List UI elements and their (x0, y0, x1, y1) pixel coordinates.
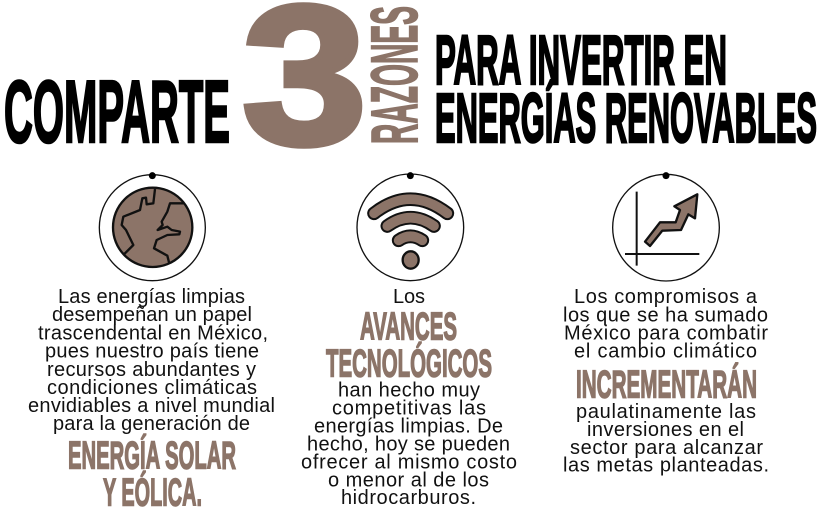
highlight: avances tecnológicos (326, 306, 492, 386)
highlight: energía solar y eólica: Y EÓLICA. (103, 470, 202, 514)
icon: globe (99, 172, 205, 281)
body text: compromisos: Los compromisos a (574, 286, 758, 308)
body text: compromisos: los que se ha sumado (563, 304, 768, 326)
body text: intro: envidiables a nivel mundial (28, 395, 275, 417)
title: COMPARTE (4, 62, 230, 161)
body text: intro: recursos abundantes y (47, 359, 256, 381)
icon: wifi (357, 172, 464, 281)
body text: intro: trascendental en México, (38, 322, 268, 344)
body text: competitividad: ofrecer al mismo costo (301, 452, 517, 474)
panel: energía solar y eólica (28, 172, 275, 514)
body text: intro: Las energías limpias (58, 286, 245, 308)
body text: compromisos (563, 286, 768, 363)
body text: compromisos: México para combatir (564, 323, 768, 345)
panel: incrementarán (563, 172, 769, 477)
title (4, 0, 817, 186)
body text: intro: para la generación de (53, 413, 250, 435)
highlight: avances tecnológicos: TECNOLÓGICOS (326, 342, 492, 386)
body text: competitividad: o menor al de los (328, 470, 489, 492)
body text: inversiones: las metas planteadas. (563, 455, 769, 477)
body text: competitividad: han hecho muy (338, 380, 480, 402)
panel: avances tecnológicos (301, 172, 517, 509)
body text: inversiones: paulatinamente las (576, 401, 756, 423)
body text: intro: desempeñan un papel (52, 304, 252, 326)
body text: competitividad: hecho, hoy se pueden (307, 434, 510, 456)
highlight: energía solar y eólica (68, 434, 236, 514)
highlight: avances tecnológicos: AVANCES (360, 306, 457, 348)
body text: los: Los (393, 286, 425, 308)
highlight: energía solar y eólica: ENERGÍA SOLAR (68, 434, 236, 478)
body text: intro: pues nuestro país tiene (45, 341, 259, 363)
body text: compromisos: el cambio climático (574, 341, 757, 363)
body text: competitividad: hidrocarburos. (341, 487, 476, 509)
body text: competitividad: competitivas las (332, 398, 486, 420)
body text: competitividad: energías limpias. De (314, 416, 503, 438)
body text: inversiones: inversiones en el (587, 419, 744, 441)
body text: intro (28, 286, 275, 435)
icon: rising chart (613, 172, 719, 281)
body text: competitividad (301, 380, 517, 509)
body text: intro: condiciones climáticas (47, 377, 257, 399)
body text: inversiones (563, 401, 769, 477)
body text: inversiones: sector para alcanzar (570, 437, 763, 459)
